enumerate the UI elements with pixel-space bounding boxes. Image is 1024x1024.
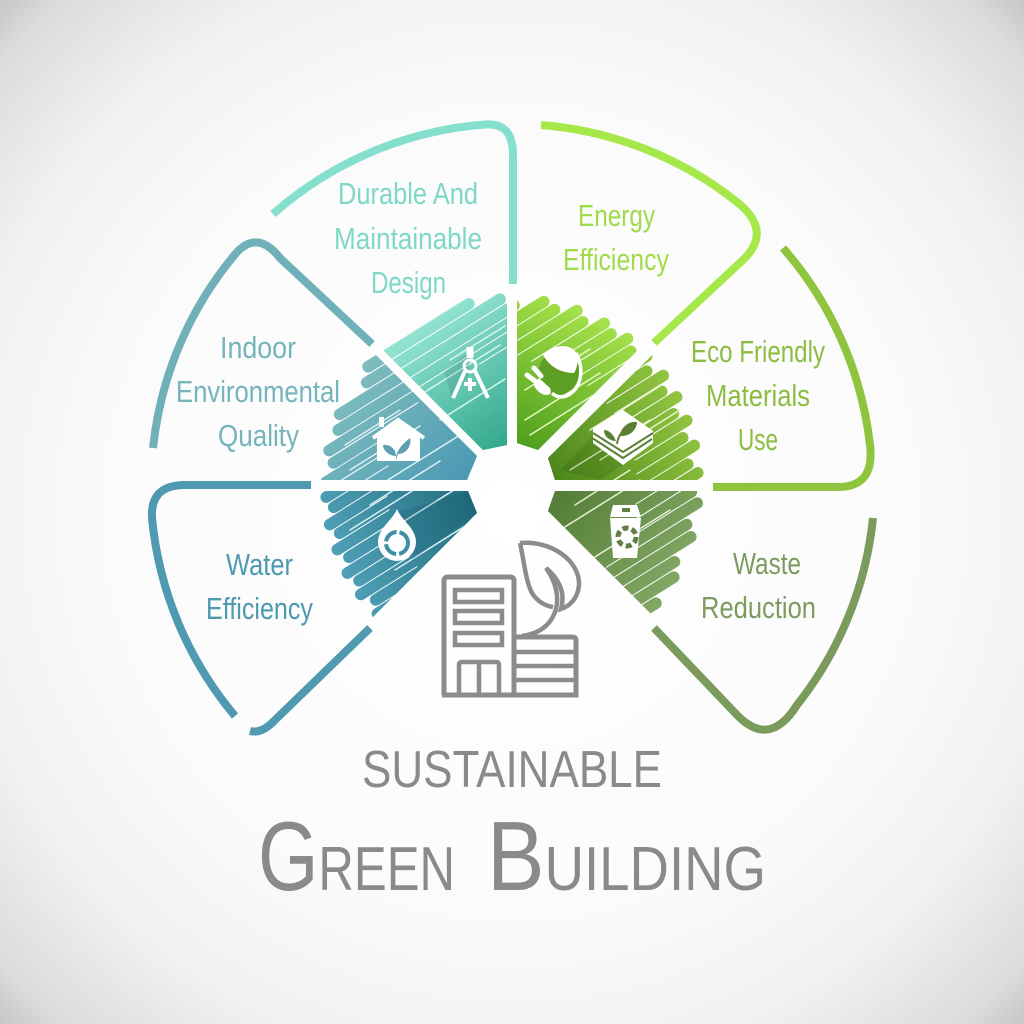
label: Efficiency <box>563 242 669 277</box>
label: Use <box>738 422 778 457</box>
label <box>206 547 313 626</box>
label: Reduction <box>701 590 816 625</box>
label: Indoor <box>220 330 296 365</box>
label <box>176 330 340 453</box>
label <box>334 176 482 300</box>
label: Environmental <box>176 374 340 409</box>
label: Water <box>226 547 293 582</box>
label: Quality <box>218 418 299 453</box>
panel: Energy Efficiency <box>517 121 761 450</box>
hatched wedge <box>320 491 477 618</box>
hatched wedge <box>320 355 477 480</box>
outline frame <box>713 248 871 487</box>
icon: leaf plug <box>527 346 581 397</box>
panel: Waste Reduction <box>548 491 877 734</box>
icon: green building with leaf <box>442 543 579 695</box>
hatched wedge <box>548 491 703 614</box>
label: Durable And <box>338 176 478 211</box>
label: Efficiency <box>206 591 313 626</box>
panel: Water Efficiency <box>148 481 477 736</box>
label: Design <box>371 265 446 300</box>
panel: Indoor Environmental Quality <box>149 238 477 480</box>
label: Materials <box>706 378 810 413</box>
hatched wedge <box>548 355 704 480</box>
label: Energy <box>578 198 655 233</box>
icon: recycling bin <box>610 505 641 558</box>
label <box>701 546 816 625</box>
outline frame <box>273 124 513 284</box>
hatched wedge <box>517 296 637 450</box>
icon: water drop with cycle arrows <box>378 509 416 561</box>
outline frame <box>541 125 757 343</box>
label <box>563 198 669 277</box>
title line: Green: GREEN <box>258 801 455 911</box>
title line: Building: BUILDING <box>487 801 766 911</box>
label: Eco Friendly <box>691 334 825 369</box>
outline frame <box>153 242 372 448</box>
icon: drafting compass <box>453 347 488 398</box>
infographic wheel <box>148 120 877 891</box>
title line: SUSTAINABLE: SUSTAINABLE <box>362 741 662 799</box>
outline frame <box>654 518 873 730</box>
icon: house with sprout <box>373 417 424 461</box>
label: Waste <box>733 546 801 581</box>
panel: Durable And Maintainable Design <box>270 120 517 450</box>
icon: material sheets with sprout <box>593 410 653 465</box>
hatched wedge <box>384 293 507 450</box>
label <box>691 334 825 457</box>
label: Maintainable <box>334 221 482 256</box>
panel: Eco Friendly Materials Use <box>548 246 875 491</box>
outline frame <box>152 485 370 732</box>
